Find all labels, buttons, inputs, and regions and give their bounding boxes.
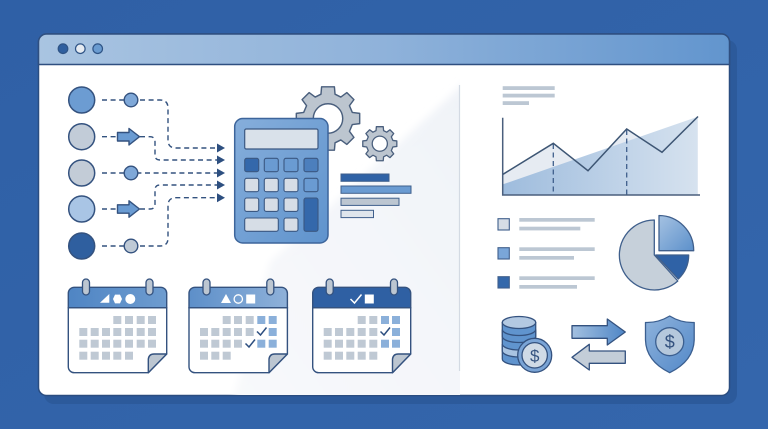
shield body bbox=[646, 316, 694, 373]
arrow: left bbox=[572, 344, 625, 370]
calendar page bbox=[68, 308, 167, 373]
intermediate circles bbox=[124, 93, 138, 253]
blue slice bbox=[659, 216, 694, 251]
header shapes bbox=[100, 294, 135, 304]
left panel light background bbox=[232, 78, 470, 405]
window body bbox=[38, 34, 730, 396]
icon: small gear bbox=[363, 127, 397, 161]
icon: coin stack bbox=[502, 316, 552, 372]
icon: shield with dollar bbox=[646, 316, 694, 373]
divider between panels bbox=[458, 85, 460, 371]
axes bbox=[503, 118, 700, 195]
window control dots bbox=[58, 44, 102, 54]
connector arrowheads bbox=[217, 144, 225, 202]
arrow: right bbox=[572, 319, 625, 345]
input nodes bbox=[69, 87, 95, 259]
calendar 2 bbox=[189, 279, 287, 373]
highlighted days bbox=[381, 316, 400, 348]
highlighted days bbox=[257, 316, 277, 348]
calendar header bbox=[313, 287, 411, 308]
legend item 1 bbox=[498, 218, 595, 230]
calculator keys bbox=[245, 158, 318, 231]
calculator screen bbox=[245, 129, 318, 149]
dashed markers bbox=[553, 130, 627, 195]
pie chart bbox=[619, 216, 694, 290]
header shapes bbox=[221, 294, 255, 304]
data line bbox=[503, 116, 698, 174]
page curl bbox=[148, 354, 167, 373]
area and line chart bbox=[503, 116, 700, 195]
dollar coin: $ bbox=[530, 346, 540, 366]
header shapes bbox=[350, 294, 374, 304]
icon: large gear bbox=[296, 87, 360, 150]
input flow diagram bbox=[69, 87, 225, 259]
day grid bbox=[79, 316, 156, 360]
binder rings bbox=[326, 279, 398, 295]
binder rings bbox=[82, 279, 153, 295]
icon: calculator bbox=[235, 118, 328, 243]
calendar 1 bbox=[68, 279, 167, 373]
calendar 3 bbox=[313, 279, 411, 373]
dark slice bbox=[656, 255, 689, 279]
top coin bbox=[502, 316, 536, 328]
calendar header bbox=[68, 287, 167, 308]
gray slice bbox=[619, 220, 678, 290]
chart caption lines bbox=[503, 86, 555, 105]
intermediate arrows bbox=[118, 128, 140, 217]
light area under line bbox=[503, 117, 698, 195]
binder rings bbox=[203, 279, 274, 295]
shield coin: $ bbox=[665, 332, 675, 352]
application window bbox=[38, 34, 730, 405]
legend item 2 bbox=[498, 247, 595, 260]
calendar page bbox=[313, 308, 411, 373]
calendar page bbox=[189, 308, 287, 373]
page curl bbox=[269, 354, 287, 373]
result bars bbox=[341, 174, 411, 218]
day grid bbox=[324, 316, 377, 360]
window shadow bbox=[44, 40, 737, 404]
blue trend area bbox=[503, 117, 698, 195]
legend item 3 bbox=[498, 276, 595, 289]
stack bands bbox=[502, 330, 536, 342]
page curl bbox=[392, 354, 411, 373]
day grid bbox=[200, 316, 254, 360]
dashed connectors bbox=[102, 100, 218, 246]
title bar bbox=[38, 34, 730, 64]
check mark bbox=[380, 328, 390, 335]
stack body bbox=[502, 322, 536, 365]
calculator body bbox=[235, 118, 328, 243]
legend bbox=[498, 218, 595, 289]
check marks bbox=[246, 328, 266, 347]
calendar header bbox=[189, 287, 287, 308]
